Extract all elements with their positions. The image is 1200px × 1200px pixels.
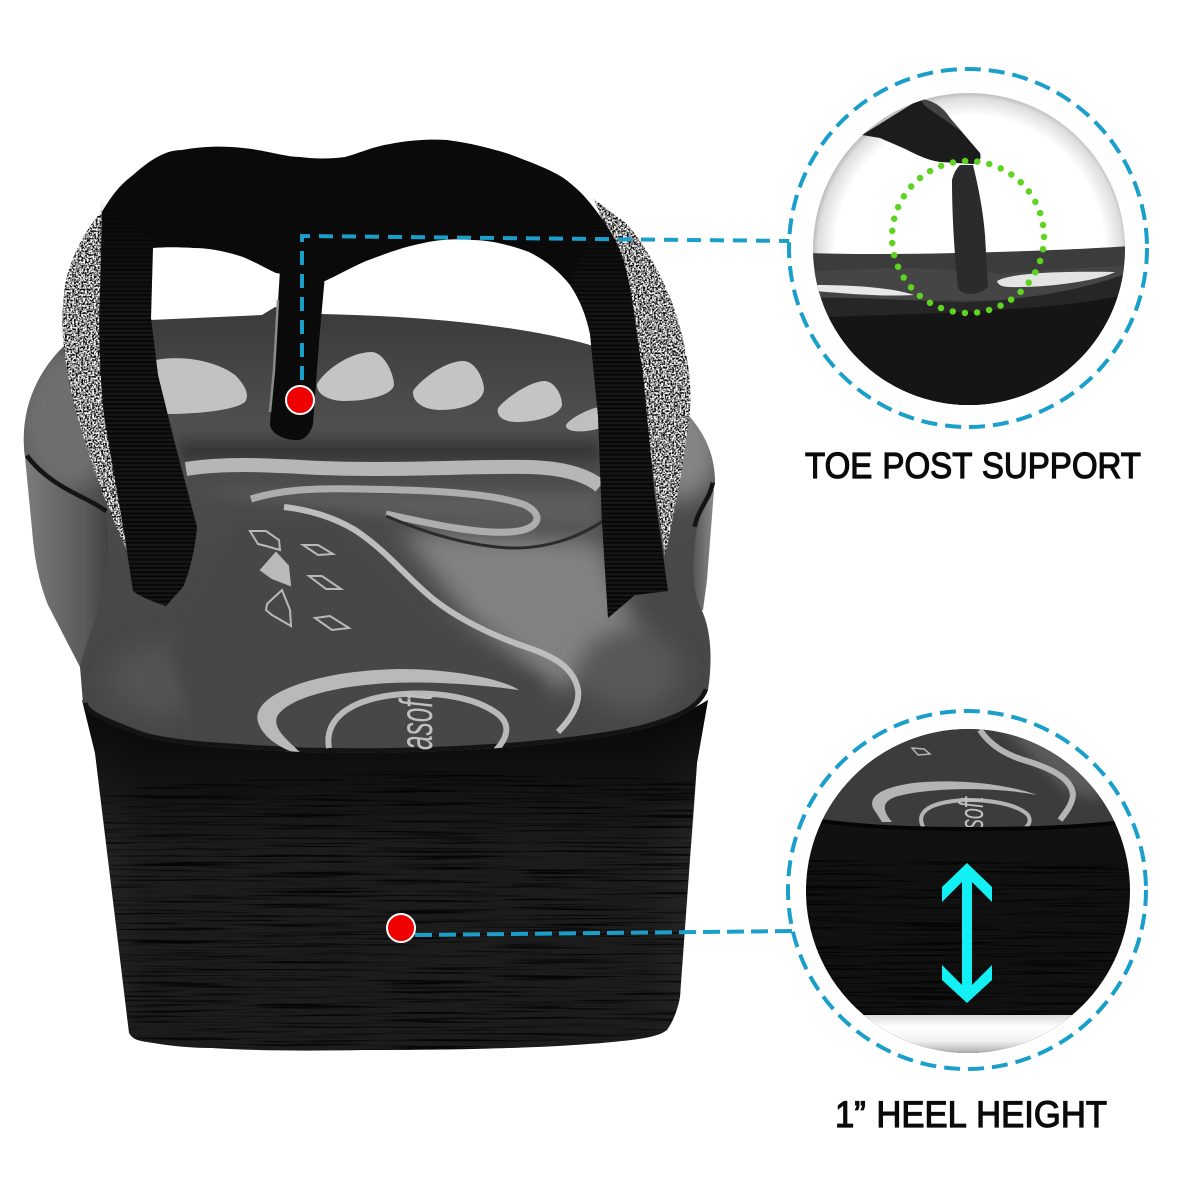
toe post	[270, 270, 325, 440]
heel swirl outer	[257, 669, 519, 752]
right wedge side	[680, 490, 714, 620]
S curve line	[284, 507, 578, 732]
inset logo text: soft	[953, 796, 991, 829]
glitter strap left	[62, 205, 135, 553]
callout: heel height	[788, 700, 1146, 1069]
green dotted highlight	[892, 161, 1044, 313]
connector: toe post callout	[302, 236, 790, 380]
label: heel height: 1” HEEL HEIGHT	[835, 1094, 1107, 1135]
rim shadow	[25, 457, 715, 753]
pressure point icons	[250, 531, 349, 630]
toe post highlight	[270, 300, 278, 412]
white ground below heel	[864, 1015, 1072, 1053]
panel: sandal product view	[16, 140, 720, 1051]
footbed surface	[16, 307, 720, 760]
inset inner swirl	[921, 800, 1030, 830]
inset photo	[806, 729, 1130, 1053]
left wedge side	[25, 457, 125, 667]
toe print 4	[498, 381, 562, 422]
inset heel rim	[800, 818, 1140, 829]
inset S curve	[980, 730, 1073, 820]
arch swirl inner	[251, 489, 537, 532]
inset small icons	[912, 748, 930, 755]
marker: heel red dot	[387, 914, 415, 942]
inset footbed	[822, 729, 1115, 827]
label: toe post support: TOE POST SUPPORT	[805, 445, 1141, 486]
toe print 2	[317, 352, 394, 401]
toe print 5	[566, 407, 600, 431]
height arrow	[942, 863, 992, 1003]
callout: toe post support	[789, 69, 1147, 427]
footbed shading	[16, 345, 720, 760]
dashed ring	[788, 711, 1146, 1069]
inset photo	[810, 90, 1130, 410]
toe print 1	[156, 358, 247, 414]
black fabric strap	[99, 140, 668, 618]
glitter strap right	[594, 199, 691, 557]
inset outer swirl	[872, 781, 1037, 822]
heel swirl inner	[328, 694, 506, 750]
toe post closeup	[952, 165, 988, 294]
strap tip	[862, 99, 981, 164]
arch swirl shadow	[386, 516, 610, 548]
sole band	[810, 246, 1130, 410]
heel block	[82, 700, 708, 1051]
dashed ring	[789, 69, 1147, 427]
marker: toe post red dot	[286, 386, 314, 414]
toe print 3	[413, 361, 484, 410]
connector: heel height callout	[415, 931, 795, 935]
arch swirl upper band	[186, 465, 600, 486]
sole body	[820, 274, 1123, 405]
brand logo text: asoft	[390, 692, 442, 750]
white toe gaps	[815, 285, 914, 296]
inset light arch	[1006, 734, 1100, 800]
